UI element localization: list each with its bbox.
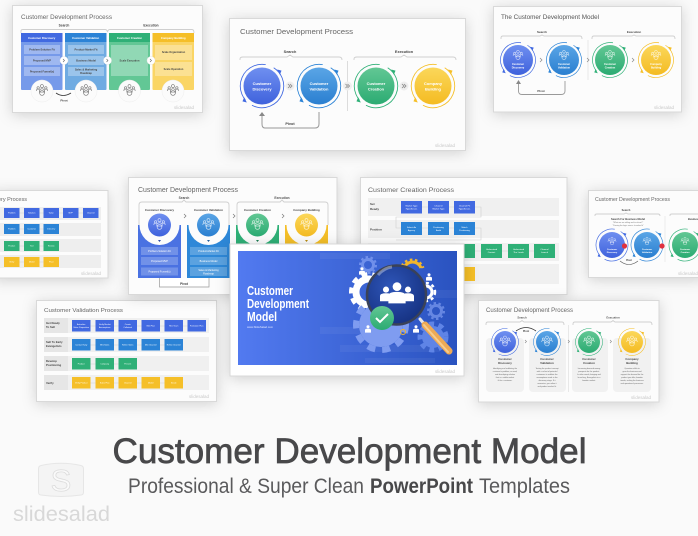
slide: customer creation process: Agency xyxy=(408,229,416,232)
pivot box xyxy=(160,278,209,287)
card: customer creation: Increasing demand among xyxy=(578,367,600,370)
slide: customer development process circles xyxy=(230,18,466,150)
slide: customer development process columns: Problem-Solution Fit xyxy=(29,48,55,52)
slide title: Customer Creation Process xyxy=(368,187,455,194)
card: customer creation: Customer xyxy=(582,357,597,361)
card: customer validation: Testing the product concept xyxy=(535,367,559,370)
card: customer discovery: fit for a customer. xyxy=(498,379,513,382)
slide: customer development process with search for business model: Customer xyxy=(607,248,617,251)
circle: customer validation: Validation xyxy=(310,86,329,92)
slide: the customer development model xyxy=(494,6,682,112)
slide: customer development process cards: Customer Validation xyxy=(194,208,223,212)
slide: the customer development model: Company xyxy=(650,62,662,66)
slide: customer development process with search for business model: slidesalad xyxy=(678,271,698,276)
slide: customer development process cards: Customer Creation xyxy=(244,208,271,212)
card: company building: support the demand for the xyxy=(621,373,643,376)
slide title: Customer Development Process xyxy=(21,14,112,21)
slide: the customer development model: slidesalad xyxy=(654,105,674,110)
slide: customer validation process: Mini Channel xyxy=(145,344,157,346)
slide: customer development process circles: Search xyxy=(284,50,297,54)
card: customer creation: In other words, bringing and xyxy=(577,373,601,376)
card: customer creation: launching, Evangelists to a xyxy=(578,376,601,379)
icon: orange gear xyxy=(402,260,423,268)
slide: customer development process columns: Business Model xyxy=(76,58,96,62)
slide: customer creation process: Channel Fit xyxy=(459,204,470,208)
slide: customer discovery process (cropped): MVP xyxy=(69,212,74,214)
slide: customer validation process: Product xyxy=(78,362,85,366)
slide: the customer development model: Pivot xyxy=(537,89,545,93)
slide: customer creation process: Market Type xyxy=(432,208,445,210)
slide: customer development process with search for business model: "What are we selling and to whom?" xyxy=(613,221,643,224)
slide: customer development process columns: Customer Discovery xyxy=(28,36,56,40)
icon: white gear xyxy=(351,274,387,310)
slide: customer validation process: Refine Channel xyxy=(167,344,181,346)
column: customer discovery xyxy=(138,205,181,278)
slide: customer creation process: Channel xyxy=(434,206,443,208)
slide: customer validation process: slidesalad xyxy=(189,394,209,399)
circle: customer discovery xyxy=(234,58,290,114)
card: company building: Operation shifts to xyxy=(624,367,640,370)
slide: customer creation process: Launch xyxy=(541,252,549,254)
slide: customer creation process: Positioning xyxy=(433,226,445,229)
slide: customer creation process: Channel xyxy=(540,249,549,251)
subtitle: Templates xyxy=(479,475,570,498)
slide: customer development process columns: Customer Creation xyxy=(117,36,142,40)
slide: the customer development model: Search xyxy=(537,30,547,34)
slide: customer discovery process (cropped): Customer xyxy=(27,228,36,230)
slide: customer creation process: Select An xyxy=(407,226,417,229)
card: customer discovery: and developing solution xyxy=(495,373,515,376)
slide: customer discovery process (cropped): Product xyxy=(8,244,16,248)
column: customer validation xyxy=(187,205,230,278)
slide: customer development process with descriptions: slidesalad xyxy=(631,395,651,400)
slide: customer validation process: Value Proposition xyxy=(73,326,89,329)
card: company building: product you offer, broader xyxy=(621,376,643,379)
slide: customer creation process: The Leads xyxy=(513,252,525,254)
cover title xyxy=(247,284,310,324)
slide: customer creation process xyxy=(360,178,567,294)
slide: customer validation process: Mini Plan xyxy=(147,326,155,328)
slide: customer development process columns: Proposed MVP xyxy=(33,58,51,62)
slide: customer development process columns: Sales & Marketing xyxy=(75,68,98,72)
slide: the customer development model: Validation xyxy=(558,66,571,70)
slide: the customer development model: Creation xyxy=(605,66,616,70)
slide: customer creation process: Hypotheses xyxy=(459,208,471,210)
slide: customer validation process: Iterate xyxy=(171,382,177,384)
slide: customer validation process xyxy=(36,300,216,402)
slide: customer development process cards: Execution xyxy=(274,196,290,200)
slide: customer development process cards: Proposed Funnel(s) xyxy=(149,270,171,274)
slide: customer development process cards: Company Building xyxy=(293,208,320,212)
circle: company building: Building xyxy=(425,86,442,92)
slide: hero cover: slidesalad xyxy=(435,369,455,374)
slide: customer development process with descriptions: Search xyxy=(517,316,527,320)
icon: magnifier lens xyxy=(367,266,426,324)
slide: customer validation process: Evangelists xyxy=(46,344,62,348)
card: customer validation: resonates, you refine it xyxy=(537,382,557,385)
slide: the customer development model: Execution xyxy=(627,30,641,34)
slide: customer development process columns xyxy=(12,6,202,112)
icon: pale gear xyxy=(356,300,406,350)
slide: customer creation process: Understand xyxy=(513,248,525,251)
pivot arc xyxy=(516,328,536,333)
cover title: Development xyxy=(247,297,310,311)
card: company building: and operational processes. xyxy=(621,382,644,385)
slide: hero cover xyxy=(230,244,464,376)
icon: logo tile: S xyxy=(51,463,71,498)
slide: customer development process cards xyxy=(128,178,337,294)
slide: customer validation process: Sell To Early xyxy=(46,340,63,344)
slide: customer development process cards: Roadmap xyxy=(203,272,215,276)
slide: the customer development model: Discovery xyxy=(512,66,525,70)
circle: customer validation: Customer xyxy=(310,81,329,86)
slide: customer development process columns: Search xyxy=(59,24,69,28)
slide: customer discovery process (cropped): Test xyxy=(30,244,34,248)
slide: customer validation process: Verify xyxy=(46,381,54,385)
card: customer creation xyxy=(571,324,607,382)
slide title: Customer Development Process xyxy=(595,197,671,203)
card: customer validation: assumptions made in the xyxy=(536,376,558,379)
slide: customer validation process: Present xyxy=(124,362,132,366)
slide: customer validation process: Hire Team xyxy=(169,326,179,328)
slide: customer development process columns: Product-Market Fit xyxy=(75,48,98,52)
slide: customer development process circles: Pivot xyxy=(285,122,295,126)
circle: customer validation xyxy=(291,58,347,114)
slide title: Customer Validation Process xyxy=(44,308,123,314)
slide: customer development process with search for business model: Validation xyxy=(642,251,653,254)
slide: customer creation process: Match xyxy=(462,226,468,229)
subtitle: Professional & Super Clean xyxy=(128,475,364,498)
circle: customer creation xyxy=(348,58,404,114)
slide: the customer development model: Customer xyxy=(512,62,524,66)
card: customer discovery: customer's problem, or need, xyxy=(493,370,518,373)
slide title: Customer Development Process xyxy=(240,27,353,36)
card: customer creation: broader market. xyxy=(582,379,596,382)
card: customer validation xyxy=(529,324,565,388)
slide: customer discovery process (cropped): Review xyxy=(48,246,55,248)
card: company building: grow the business and xyxy=(623,370,641,373)
slide: customer validation process: Assumptions xyxy=(99,326,110,329)
slide: customer validation process: Formalize Plan xyxy=(190,326,203,328)
slide: customer validation process: Articulate xyxy=(77,323,86,326)
slide: customer validation process: Company xyxy=(100,364,109,366)
slide: customer development process cards: Customer Discovery xyxy=(145,208,174,212)
slide: customer discovery process (cropped): Pivot xyxy=(49,260,54,264)
circle: company building xyxy=(405,58,461,114)
slide: customer creation process: Set xyxy=(370,202,375,206)
slide: customer validation process: Sales Plan xyxy=(100,382,109,384)
slide: customer development process columns: Roadmap xyxy=(80,71,92,75)
card: customer discovery: that is a viable market xyxy=(496,376,515,379)
slide: customer development process columns: Proposed Funnel(s) xyxy=(30,70,54,74)
slide: customer development process with search for business model: Customer xyxy=(680,248,690,251)
subtitle xyxy=(128,475,570,498)
slide: customer discovery process (cropped): Channel xyxy=(87,212,95,214)
slide: customer development process circles: slidesalad xyxy=(435,143,455,148)
slide: customer development process columns: Scale Operation xyxy=(164,67,184,71)
slide: customer discovery process (cropped): Verify xyxy=(9,262,14,264)
slide: customer development process cards: Problem-Solution Fit xyxy=(148,250,171,253)
slide: customer validation process: To Sell xyxy=(46,325,55,329)
slide: customer development process with search for business model: "Proving the logic source it makes fit" xyxy=(612,224,644,227)
slide: customer development process columns: Scale Organization xyxy=(162,50,186,54)
card: customer discovery: Discovery xyxy=(498,361,512,365)
icon: check badge xyxy=(370,306,394,330)
card: company building: trends, scaling the business xyxy=(620,379,644,382)
slide: customer validation process: Refine Sales xyxy=(122,344,133,346)
slide: customer discovery process (cropped): Problem xyxy=(8,228,16,230)
slide: customer discovery process (cropped): Interview xyxy=(47,228,56,230)
card: customer validation: and product market fit. xyxy=(538,385,557,388)
slide: customer development process cards: Search xyxy=(179,196,189,200)
cover title: Model xyxy=(247,310,277,324)
slide: customer creation process: Ready xyxy=(370,207,379,211)
slide: customer development process cards: Product-Market Fit xyxy=(198,250,219,253)
slide: customer validation process: Get Ready xyxy=(46,321,60,325)
logo: slidesalad xyxy=(13,463,110,526)
slide: customer validation process: Mini Sales xyxy=(100,344,109,346)
slide: customer discovery process (cropped): Solution xyxy=(28,212,35,214)
slide: customer validation process: Collateral xyxy=(123,326,132,329)
slide: customer discovery process (cropped): Value xyxy=(49,212,55,214)
slide: customer development process cards: Business Model xyxy=(200,260,218,263)
slide: customer development process cards: Sales & Marketing xyxy=(198,269,219,272)
slide: customer development process with descriptions: Execution xyxy=(606,316,620,320)
card: company building: Company xyxy=(625,357,639,361)
slide: customer development process with search for business model xyxy=(588,190,698,278)
card: customer validation: discovery stage. If it xyxy=(539,379,556,382)
slide: customer development process columns: Pivot xyxy=(60,98,68,102)
card: customer validation: Validation xyxy=(540,361,554,365)
slide: customer creation process: Market Type xyxy=(406,204,418,208)
slide: customer validation process: Contact Early xyxy=(75,344,87,346)
circle: customer creation: Customer xyxy=(367,81,386,86)
icon: small people xyxy=(359,267,432,333)
slide: customer validation process: Develop xyxy=(46,359,57,363)
column: company building xyxy=(285,205,328,278)
slide: customer creation process: Position xyxy=(370,228,382,232)
slide: customer discovery process (cropped) xyxy=(0,190,108,278)
slide: customer discovery process (cropped): slidesalad xyxy=(81,271,101,276)
illustration: gears and magnifier xyxy=(351,257,449,352)
slide: customer development process circles: Execution xyxy=(395,50,414,54)
slide: customer development process with search for business model: Pivot xyxy=(626,259,632,262)
slide: the customer development model: Building xyxy=(651,66,662,70)
main title: Customer Development Model xyxy=(112,432,586,471)
card: customer creation: prospects for the product. xyxy=(578,370,600,373)
slide: customer development process columns: Customer Validation xyxy=(72,36,100,40)
card: customer discovery: Identifying and validating the xyxy=(493,367,517,370)
pivot arc: Pivot xyxy=(523,329,529,333)
slide: customer validation process: Verify Market xyxy=(99,323,111,326)
card: company building: Building xyxy=(626,361,638,365)
circle: customer creation: Creation xyxy=(368,86,385,92)
card: customer validation: with a cohort of potential xyxy=(537,370,558,373)
slide: customer discovery process (cropped): Model xyxy=(29,262,35,264)
slide: customer validation process: Verify Product xyxy=(75,382,88,384)
slide: customer development process with search for business model: Discovery xyxy=(607,252,618,254)
slide: customer validation process: Model xyxy=(148,382,154,384)
slide: customer development process with search for business model: Search xyxy=(622,208,631,212)
card: customer validation: customers to validate the xyxy=(536,373,558,376)
logo wordmark: slidesalad xyxy=(13,503,110,526)
slide: customer validation process: Positioning xyxy=(46,363,62,367)
slide: customer development process cards: Proposed MVP xyxy=(151,260,168,263)
column: customer creation xyxy=(236,205,279,278)
slide: customer development process columns: slidesalad xyxy=(174,105,194,110)
circle: customer discovery: Customer xyxy=(253,81,272,86)
slide title: Customer Development Process xyxy=(486,308,573,314)
circle: company building: Company xyxy=(424,81,443,86)
card: customer creation: Creation xyxy=(583,361,595,365)
icon: magnifier handle xyxy=(420,319,449,352)
subtitle: PowerPoint xyxy=(370,475,473,498)
slide: customer development process with search for business model: Creation xyxy=(681,251,690,254)
card: company building xyxy=(614,324,650,385)
slide: customer development process columns: Execution xyxy=(143,24,159,28)
card: customer discovery: Customer xyxy=(498,357,513,361)
card: customer discovery xyxy=(487,324,523,382)
slide: customer creation process: Audit xyxy=(436,229,441,232)
slide: hero cover: www.SlideSalad.com xyxy=(247,325,274,329)
slide: customer creation process: Hypotheses xyxy=(406,208,418,210)
slide: customer development process with search for business model: Customer xyxy=(642,248,652,251)
slide title: Customer Development Process xyxy=(138,187,238,194)
slide: customer validation process: Channel xyxy=(124,382,132,384)
cover title: Customer xyxy=(247,284,293,298)
card: customer validation: Customer xyxy=(540,357,555,361)
slide: the customer development model: Customer xyxy=(558,62,570,66)
slide: customer development process with search for business model: Search For Business Model xyxy=(611,217,645,221)
circle: customer discovery: Discovery xyxy=(252,86,272,92)
slide: the customer development model: Customer xyxy=(604,62,616,66)
slide: customer creation process: Positioning xyxy=(459,229,471,232)
slide: customer creation process: Understand xyxy=(486,248,498,251)
slide: customer validation process: Create xyxy=(125,323,132,326)
slide: customer development process columns: Scale Execution xyxy=(120,58,140,62)
slide title: The Customer Development Model xyxy=(501,14,599,21)
blue cover panel xyxy=(238,251,457,365)
slide: customer development process with descriptions xyxy=(478,300,659,402)
slide: customer discovery process (cropped): Problem xyxy=(8,212,16,214)
slide: customer development process columns: Company Building xyxy=(161,36,186,40)
pivot box: Pivot xyxy=(180,282,189,286)
slide: customer creation process: Contact xyxy=(488,251,496,254)
